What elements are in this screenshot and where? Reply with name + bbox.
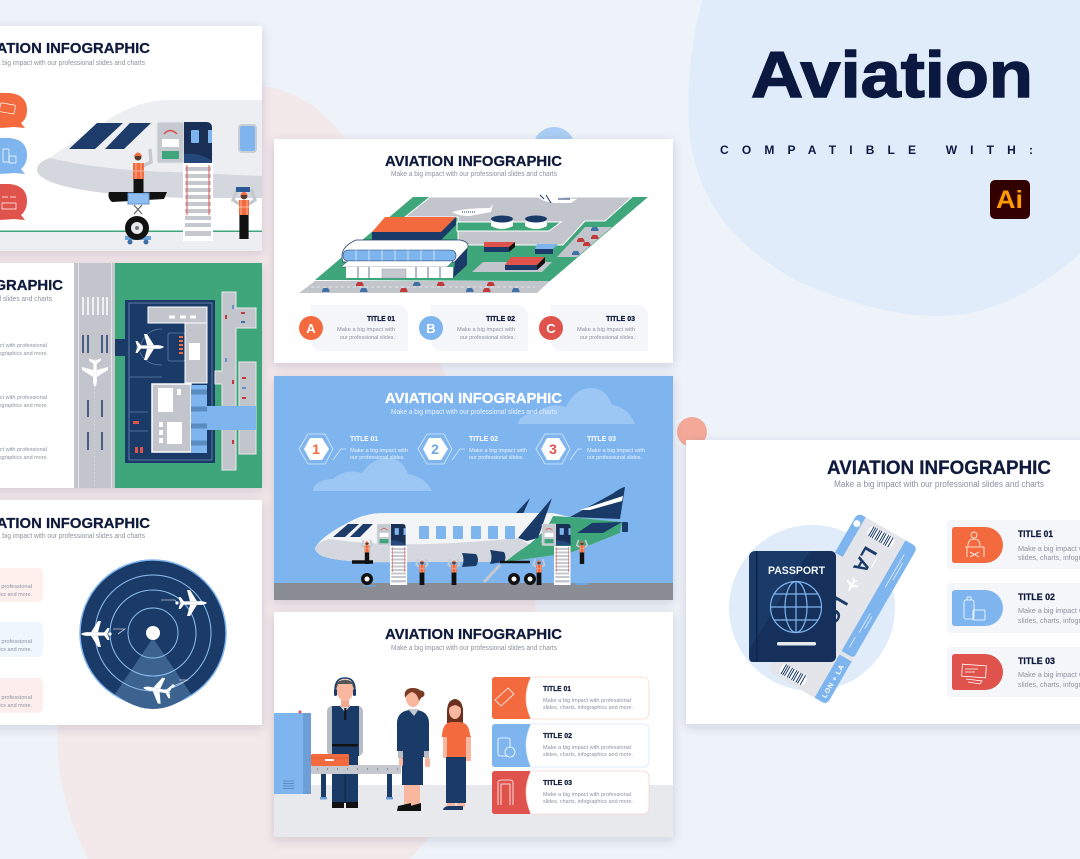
slide title: AVIATION INFOGRAPHIC xyxy=(385,390,562,407)
panel: aircraft nose slide xyxy=(0,26,262,251)
list item 2: slides, charts, infographics and more. xyxy=(543,752,633,758)
boarding pass xyxy=(767,513,918,705)
card A: TITLE 01 xyxy=(367,316,395,323)
cloud right xyxy=(518,388,635,424)
parked aircraft xyxy=(452,194,577,216)
panel: airport plan slide xyxy=(0,263,262,488)
cabin door xyxy=(157,122,212,163)
callout 3 xyxy=(0,678,43,713)
step 2: Make a big impact with xyxy=(469,448,527,454)
landing gear xyxy=(352,562,536,585)
speech bubble: blue xyxy=(0,138,27,174)
list item 1: TITLE 01 xyxy=(543,686,571,693)
parked cars xyxy=(356,235,598,292)
rear fin xyxy=(515,498,530,514)
step 2: 2 xyxy=(431,441,439,457)
list item 2: TITLE 02 xyxy=(543,733,572,740)
icon: Illustrator badge: Ai xyxy=(996,186,1023,214)
runway xyxy=(74,263,115,488)
person: security officer xyxy=(327,678,363,808)
card C: Make a big impact with xyxy=(577,327,635,333)
airliner xyxy=(315,487,628,585)
list item 1: slides, charts, infographics and more. xyxy=(543,705,633,711)
stairs xyxy=(390,546,407,585)
card B: B xyxy=(426,321,436,336)
slide subtitle: Make a big impact with our professional slides and charts xyxy=(391,171,557,178)
step 1: our professional slides. xyxy=(350,455,405,461)
list item 3 xyxy=(947,647,1080,697)
step 1: TITLE 01 xyxy=(350,436,378,443)
apron xyxy=(115,300,215,463)
boarding pass: LA xyxy=(848,542,881,577)
wing root and lift xyxy=(108,192,167,214)
card C: C xyxy=(546,321,556,336)
list item 3: TITLE 03 xyxy=(543,780,572,787)
speech bubble: orange xyxy=(0,93,27,128)
list item 2 xyxy=(947,583,1080,633)
cabin window xyxy=(239,125,256,152)
floor xyxy=(274,785,673,837)
list item 2: Make a big impact with professional xyxy=(543,745,631,751)
panel: isometric airport slide xyxy=(274,139,673,363)
card A: Make a big impact with xyxy=(337,327,395,333)
panel: airport staff slide xyxy=(274,612,673,837)
person: passenger xyxy=(442,699,471,810)
step 2: TITLE 02 xyxy=(469,436,498,443)
list item 3 xyxy=(492,771,649,814)
person: flight attendant xyxy=(397,688,430,811)
ground crew xyxy=(362,540,588,586)
slide title: AVIATION INFOGRAPHIC xyxy=(827,458,1051,479)
tarmac xyxy=(274,583,673,600)
list item 3: TITLE 03 xyxy=(1018,656,1055,666)
background blob: blue xyxy=(688,0,1080,316)
engines xyxy=(462,553,478,567)
slide title: AVIATION INFOGRAPHIC xyxy=(385,626,562,643)
step 1: 1 xyxy=(312,441,320,457)
isometric airport illustration xyxy=(299,194,648,293)
callout 2 xyxy=(0,622,43,657)
card C: TITLE 03 xyxy=(606,316,635,323)
aircraft fuselage xyxy=(37,100,262,198)
list item 3: Make a big impact with professional xyxy=(543,792,631,798)
list item 1 xyxy=(947,520,1080,569)
slide title: AVIATION INFOGRAPHIC xyxy=(385,153,562,170)
list item 2: TITLE 02 xyxy=(1018,592,1055,602)
main heading: Aviation xyxy=(751,38,1033,111)
green field xyxy=(115,263,262,488)
text block 3 xyxy=(0,447,48,461)
list item 2 xyxy=(492,724,649,767)
card C xyxy=(539,305,648,351)
decorative circle: coral xyxy=(677,417,707,447)
boarding bridge xyxy=(191,385,256,453)
card A xyxy=(299,305,408,351)
passport xyxy=(749,551,836,662)
list item 3: slides, charts, infographics and more. xyxy=(543,799,633,805)
runway aircraft xyxy=(82,358,108,387)
tail fin xyxy=(570,487,625,519)
step 3: TITLE 03 xyxy=(587,436,616,443)
decorative circle: blue xyxy=(533,127,575,169)
boarding pass: LON xyxy=(811,593,852,640)
worker signalling xyxy=(233,187,255,239)
backdrop circle xyxy=(729,525,895,691)
boarding pass: LON + LA xyxy=(821,664,846,699)
boarding stairs xyxy=(183,163,213,241)
text block 2 xyxy=(0,395,48,409)
conveyor belt xyxy=(311,765,401,800)
step 1 xyxy=(299,434,408,464)
hangar xyxy=(372,217,456,240)
callout 1 xyxy=(0,568,43,602)
slide subtitle: Make a big impact with our professional slides and charts xyxy=(391,409,557,416)
apron aircraft xyxy=(136,334,164,360)
baggage scanner xyxy=(274,710,311,794)
step 3 xyxy=(536,434,645,464)
icon: Illustrator badge xyxy=(990,180,1030,219)
step 2: our professional slides. xyxy=(469,455,524,461)
panel: airliner slide xyxy=(274,376,673,600)
compatibility label: COMPATIBLE WITH: xyxy=(720,143,1033,157)
radar chart xyxy=(80,560,226,709)
terminal xyxy=(341,240,468,278)
ground xyxy=(0,231,262,251)
step 1: Make a big impact with xyxy=(350,448,408,454)
fuselage body xyxy=(315,513,622,562)
cockpit windows xyxy=(333,524,373,537)
card A: A xyxy=(306,321,316,336)
speech bubble: red xyxy=(0,184,27,220)
card A: our professional slides. xyxy=(340,335,395,341)
doors xyxy=(377,524,406,545)
step 2 xyxy=(418,434,527,464)
step 3: 3 xyxy=(549,441,557,457)
stabilizer xyxy=(577,522,622,533)
text block 1 xyxy=(0,343,48,357)
list item 1 xyxy=(492,677,649,719)
panel: passport slide xyxy=(686,440,1080,724)
card B: our professional slides. xyxy=(460,335,515,341)
background blob: pink xyxy=(0,86,535,859)
fuel tanks xyxy=(491,216,547,229)
service buildings xyxy=(484,242,558,270)
cockpit windows xyxy=(69,123,151,149)
service road and parking xyxy=(215,292,256,470)
slide subtitle: Make a big impact with our professional slides and charts xyxy=(391,645,557,652)
step 3: Make a big impact with xyxy=(587,448,645,454)
cloud left xyxy=(313,458,432,491)
list item 1: TITLE 01 xyxy=(1018,529,1053,539)
step 3: our professional slides. xyxy=(587,455,642,461)
suitcase xyxy=(311,754,349,766)
card B xyxy=(419,305,528,351)
green livery xyxy=(505,516,622,562)
passport: PASSPORT xyxy=(768,565,825,577)
card B: TITLE 02 xyxy=(486,316,515,323)
card B: Make a big impact with xyxy=(457,327,515,333)
worker on lift xyxy=(133,149,151,193)
wing xyxy=(518,498,552,541)
terminal buildings xyxy=(148,307,207,452)
slide subtitle: Make a big impact with our professional slides and charts xyxy=(834,479,1044,489)
list item 1: Make a big impact with professional xyxy=(543,698,631,704)
landing gear xyxy=(125,216,151,244)
panel: radar slide xyxy=(0,500,262,725)
card C: our professional slides. xyxy=(580,335,635,341)
cabin windows xyxy=(419,526,515,539)
